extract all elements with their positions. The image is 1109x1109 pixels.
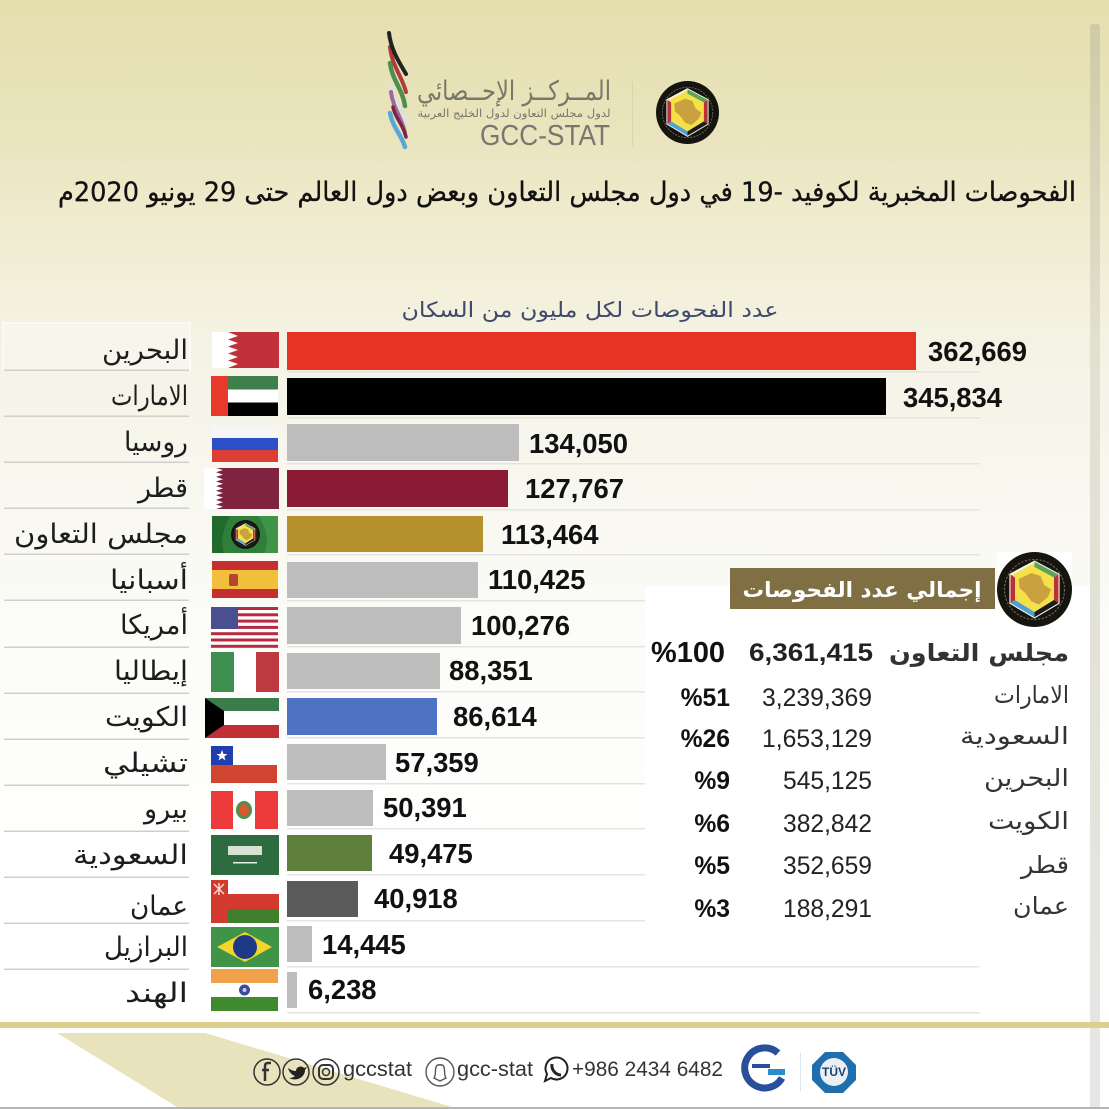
decorative triangle <box>57 1033 452 1107</box>
label: البحرين <box>102 335 188 366</box>
icon: GCC emblem table <box>997 552 1072 627</box>
icon: TUV badge: TÜV <box>822 1064 846 1079</box>
table row: GCC total: 6,361,415 <box>749 640 873 667</box>
table row: Kuwait: %6 <box>694 811 730 838</box>
value: 127,767 <box>525 473 624 504</box>
label: الكويت <box>105 702 188 733</box>
value: 88,351 <box>449 655 533 686</box>
bar <box>287 881 358 917</box>
row: Bahrain <box>102 332 1027 370</box>
gccstat handle: gccstat <box>343 1058 412 1081</box>
logo Arabic subtitle: لدول مجلس التعاون لدول الخليج العربية <box>418 107 610 120</box>
flag: India <box>211 969 278 1011</box>
row: Italy <box>114 652 533 692</box>
bar <box>287 790 373 826</box>
label: تشيلي <box>103 748 188 779</box>
bar <box>287 926 312 962</box>
emblem backing <box>997 552 1072 627</box>
flag: UAE <box>211 376 278 416</box>
table row: Qatar: قطر <box>1020 851 1069 879</box>
logo divider <box>632 82 633 146</box>
table row: Saudi Arabia: السعودية <box>960 722 1069 750</box>
value: 110,425 <box>488 564 586 595</box>
label: عمان <box>130 891 188 922</box>
panel background <box>645 586 1090 931</box>
bar <box>287 424 519 461</box>
bar <box>287 744 386 780</box>
label column background <box>3 323 190 370</box>
row: GCC <box>14 516 599 553</box>
footer <box>0 1022 1109 1109</box>
table row: Oman: %3 <box>694 896 730 923</box>
chart subtitle: عدد الفحوصات لكل مليون من السكان <box>402 298 778 322</box>
value: 57,359 <box>395 747 479 778</box>
logo Arabic name: المــركــز الإحــصائي <box>417 76 611 107</box>
right edge strip <box>1090 24 1100 1109</box>
row: Oman <box>130 880 458 923</box>
social icons <box>254 1059 339 1085</box>
icon: ISO C logo <box>745 1048 785 1088</box>
table row: Bahrain: البحرين <box>984 764 1069 792</box>
label: روسيا <box>124 427 188 458</box>
value: 40,918 <box>374 883 458 914</box>
value: 134,050 <box>529 428 628 459</box>
table row: Kuwait: الكويت <box>988 807 1069 835</box>
icon: ribbon strands <box>389 33 406 147</box>
phone number: +986 2434 6482 <box>572 1058 723 1081</box>
bottom edge <box>0 1107 1109 1109</box>
label: قطر <box>136 473 188 504</box>
banner: total tests: إجمالي عدد الفحوصات <box>742 578 982 602</box>
flag: GCC <box>212 516 278 553</box>
table row: Kuwait: 382,842 <box>783 811 872 838</box>
icon: GCC emblem top <box>656 81 719 144</box>
row: Qatar <box>136 468 624 509</box>
table row: Bahrain <box>694 764 1069 795</box>
icon: TUV badge <box>812 1052 856 1093</box>
label: مجلس التعاون <box>14 519 188 550</box>
table row: GCC total: مجلس التعاون <box>889 639 1069 667</box>
value: 6,238 <box>308 974 377 1005</box>
gold bar <box>0 1022 1109 1028</box>
value: 362,669 <box>928 336 1027 367</box>
table row: Kuwait <box>694 807 1069 838</box>
table row: UAE: 3,239,369 <box>762 685 872 712</box>
flag: Kuwait <box>205 698 279 738</box>
table row: UAE: %51 <box>681 685 730 712</box>
table row: Qatar: %5 <box>694 853 730 880</box>
flag: Qatar <box>204 468 279 509</box>
logo: GCC-STAT <box>389 33 611 152</box>
flag: Peru <box>211 791 278 829</box>
certification divider <box>800 1053 801 1091</box>
table row: Oman: 188,291 <box>783 896 872 923</box>
row: Peru <box>142 790 467 829</box>
table row: GCC total: %100 <box>651 637 725 669</box>
row: Brazil <box>104 926 406 967</box>
panel: total tests table <box>645 552 1090 931</box>
flag: Oman <box>211 880 279 923</box>
table row: UAE <box>681 681 1069 712</box>
label: إيطاليا <box>114 656 188 687</box>
table row: Bahrain: 545,125 <box>783 768 872 795</box>
gcc-stat handle: gcc-stat <box>457 1058 533 1081</box>
table row: Oman: عمان <box>1013 892 1069 920</box>
bar <box>287 698 437 735</box>
footer background <box>0 1028 1090 1107</box>
flag: Brazil <box>211 927 279 967</box>
row: Saudi Arabia <box>73 835 473 875</box>
bar <box>287 562 478 598</box>
bar <box>287 653 440 689</box>
flag: Saudi Arabia <box>211 835 279 875</box>
label: أسبانيا <box>110 561 188 596</box>
whatsapp icon <box>545 1057 568 1081</box>
bar <box>287 607 461 644</box>
flag: Chile <box>211 746 278 783</box>
bar <box>287 378 886 415</box>
label: بيرو <box>142 794 188 825</box>
bar <box>287 972 297 1008</box>
flag: USA <box>211 607 278 648</box>
label: أمريكا <box>120 606 188 641</box>
row: Russia <box>124 424 628 462</box>
table row: Saudi Arabia: 1,653,129 <box>762 726 872 753</box>
value: 86,614 <box>453 701 538 732</box>
label: الامارات <box>111 381 188 412</box>
row: Spain <box>110 561 586 598</box>
title: الفحوصات المخبرية لكوفيد -19 في دول مجلس التعاون وبعض دول العالم حتى 29 يونيو 2020م <box>58 177 1076 208</box>
value: 14,445 <box>322 929 406 960</box>
row: UAE <box>111 376 1003 416</box>
flag: Bahrain <box>212 332 279 368</box>
table row: Bahrain: %9 <box>694 768 730 795</box>
label: البرازيل <box>104 932 188 963</box>
value: 50,391 <box>383 792 467 823</box>
bar <box>287 835 372 871</box>
value: 49,475 <box>389 838 473 869</box>
label: الهند <box>125 978 188 1009</box>
bar <box>287 470 508 507</box>
flag: Italy <box>211 652 279 692</box>
flag: Spain <box>212 561 278 598</box>
table row: Qatar: 352,659 <box>783 853 872 880</box>
value: 345,834 <box>903 382 1003 413</box>
table row: Saudi Arabia <box>681 722 1069 753</box>
table row: Qatar <box>694 851 1069 880</box>
table row: Saudi Arabia: %26 <box>681 726 730 753</box>
logo GCC-STAT wordmark: GCC-STAT <box>480 120 610 152</box>
label: السعودية <box>73 840 188 871</box>
banner: total tests <box>730 568 995 609</box>
snapchat icon <box>426 1058 454 1086</box>
bar <box>287 332 916 370</box>
row: USA <box>120 606 570 648</box>
table row: Oman <box>694 892 1069 923</box>
bar <box>287 516 483 552</box>
row: Kuwait <box>105 698 538 738</box>
row: India <box>125 969 377 1011</box>
row: Chile <box>103 744 479 783</box>
value: 113,464 <box>501 519 599 550</box>
table row: GCC total <box>651 637 1069 669</box>
table row: UAE: الامارات <box>994 681 1069 709</box>
value: 100,276 <box>471 610 570 641</box>
flag: Russia <box>212 426 278 462</box>
